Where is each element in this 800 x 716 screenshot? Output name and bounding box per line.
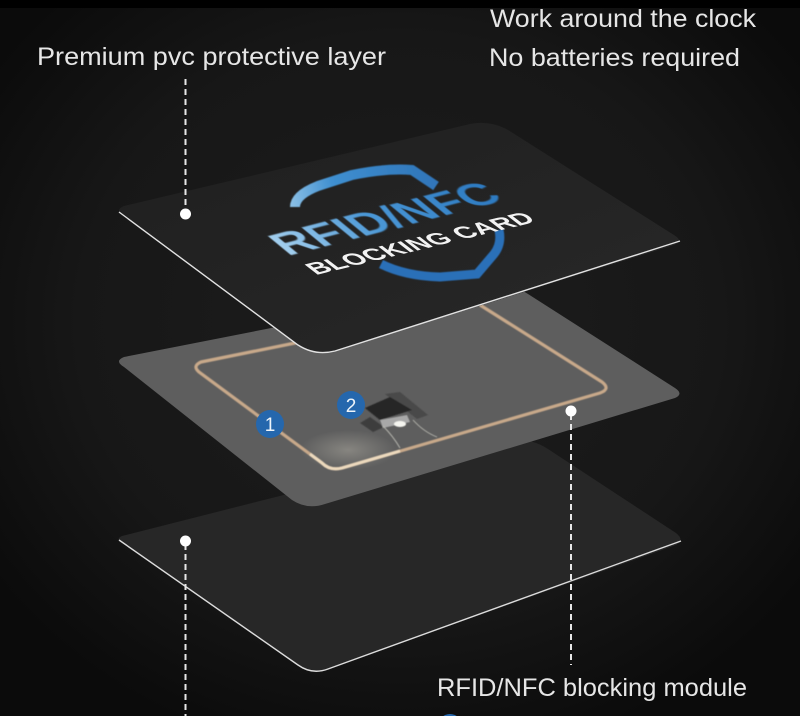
logo: BLOCKING CARD wordmark: BLOCKING CARD [298,208,542,278]
label: work around the clock: Work around the clock [490,5,757,33]
label: no batteries required: No batteries required [489,44,740,72]
chip glow [300,430,396,470]
logo: shield outline [295,170,500,277]
top black bar [0,0,800,8]
badge 1: 1 [265,415,275,436]
panel: bottom card layer [118,439,681,671]
panel: middle RFID/NFC module layer [119,284,680,506]
badge 1 [256,410,284,438]
badge 2 [337,391,365,419]
cropped blue badge at bottom edge [438,714,462,716]
copper coil antenna [196,305,606,469]
panel: top premium PVC card layer [119,123,680,353]
logo: RFID/NFC wordmark: RFID/NFC [258,176,513,262]
badge 2: 2 [346,396,356,417]
label: RFID/NFC blocking module: RFID/NFC blocking module [437,674,747,702]
label: premium pvc protective layer: Premium pvc protective layer [37,43,386,71]
leader: premium pvc layer [180,79,191,220]
leader: blocking module [566,406,576,665]
microchip [360,392,437,448]
leader: bottom layer [180,536,191,716]
